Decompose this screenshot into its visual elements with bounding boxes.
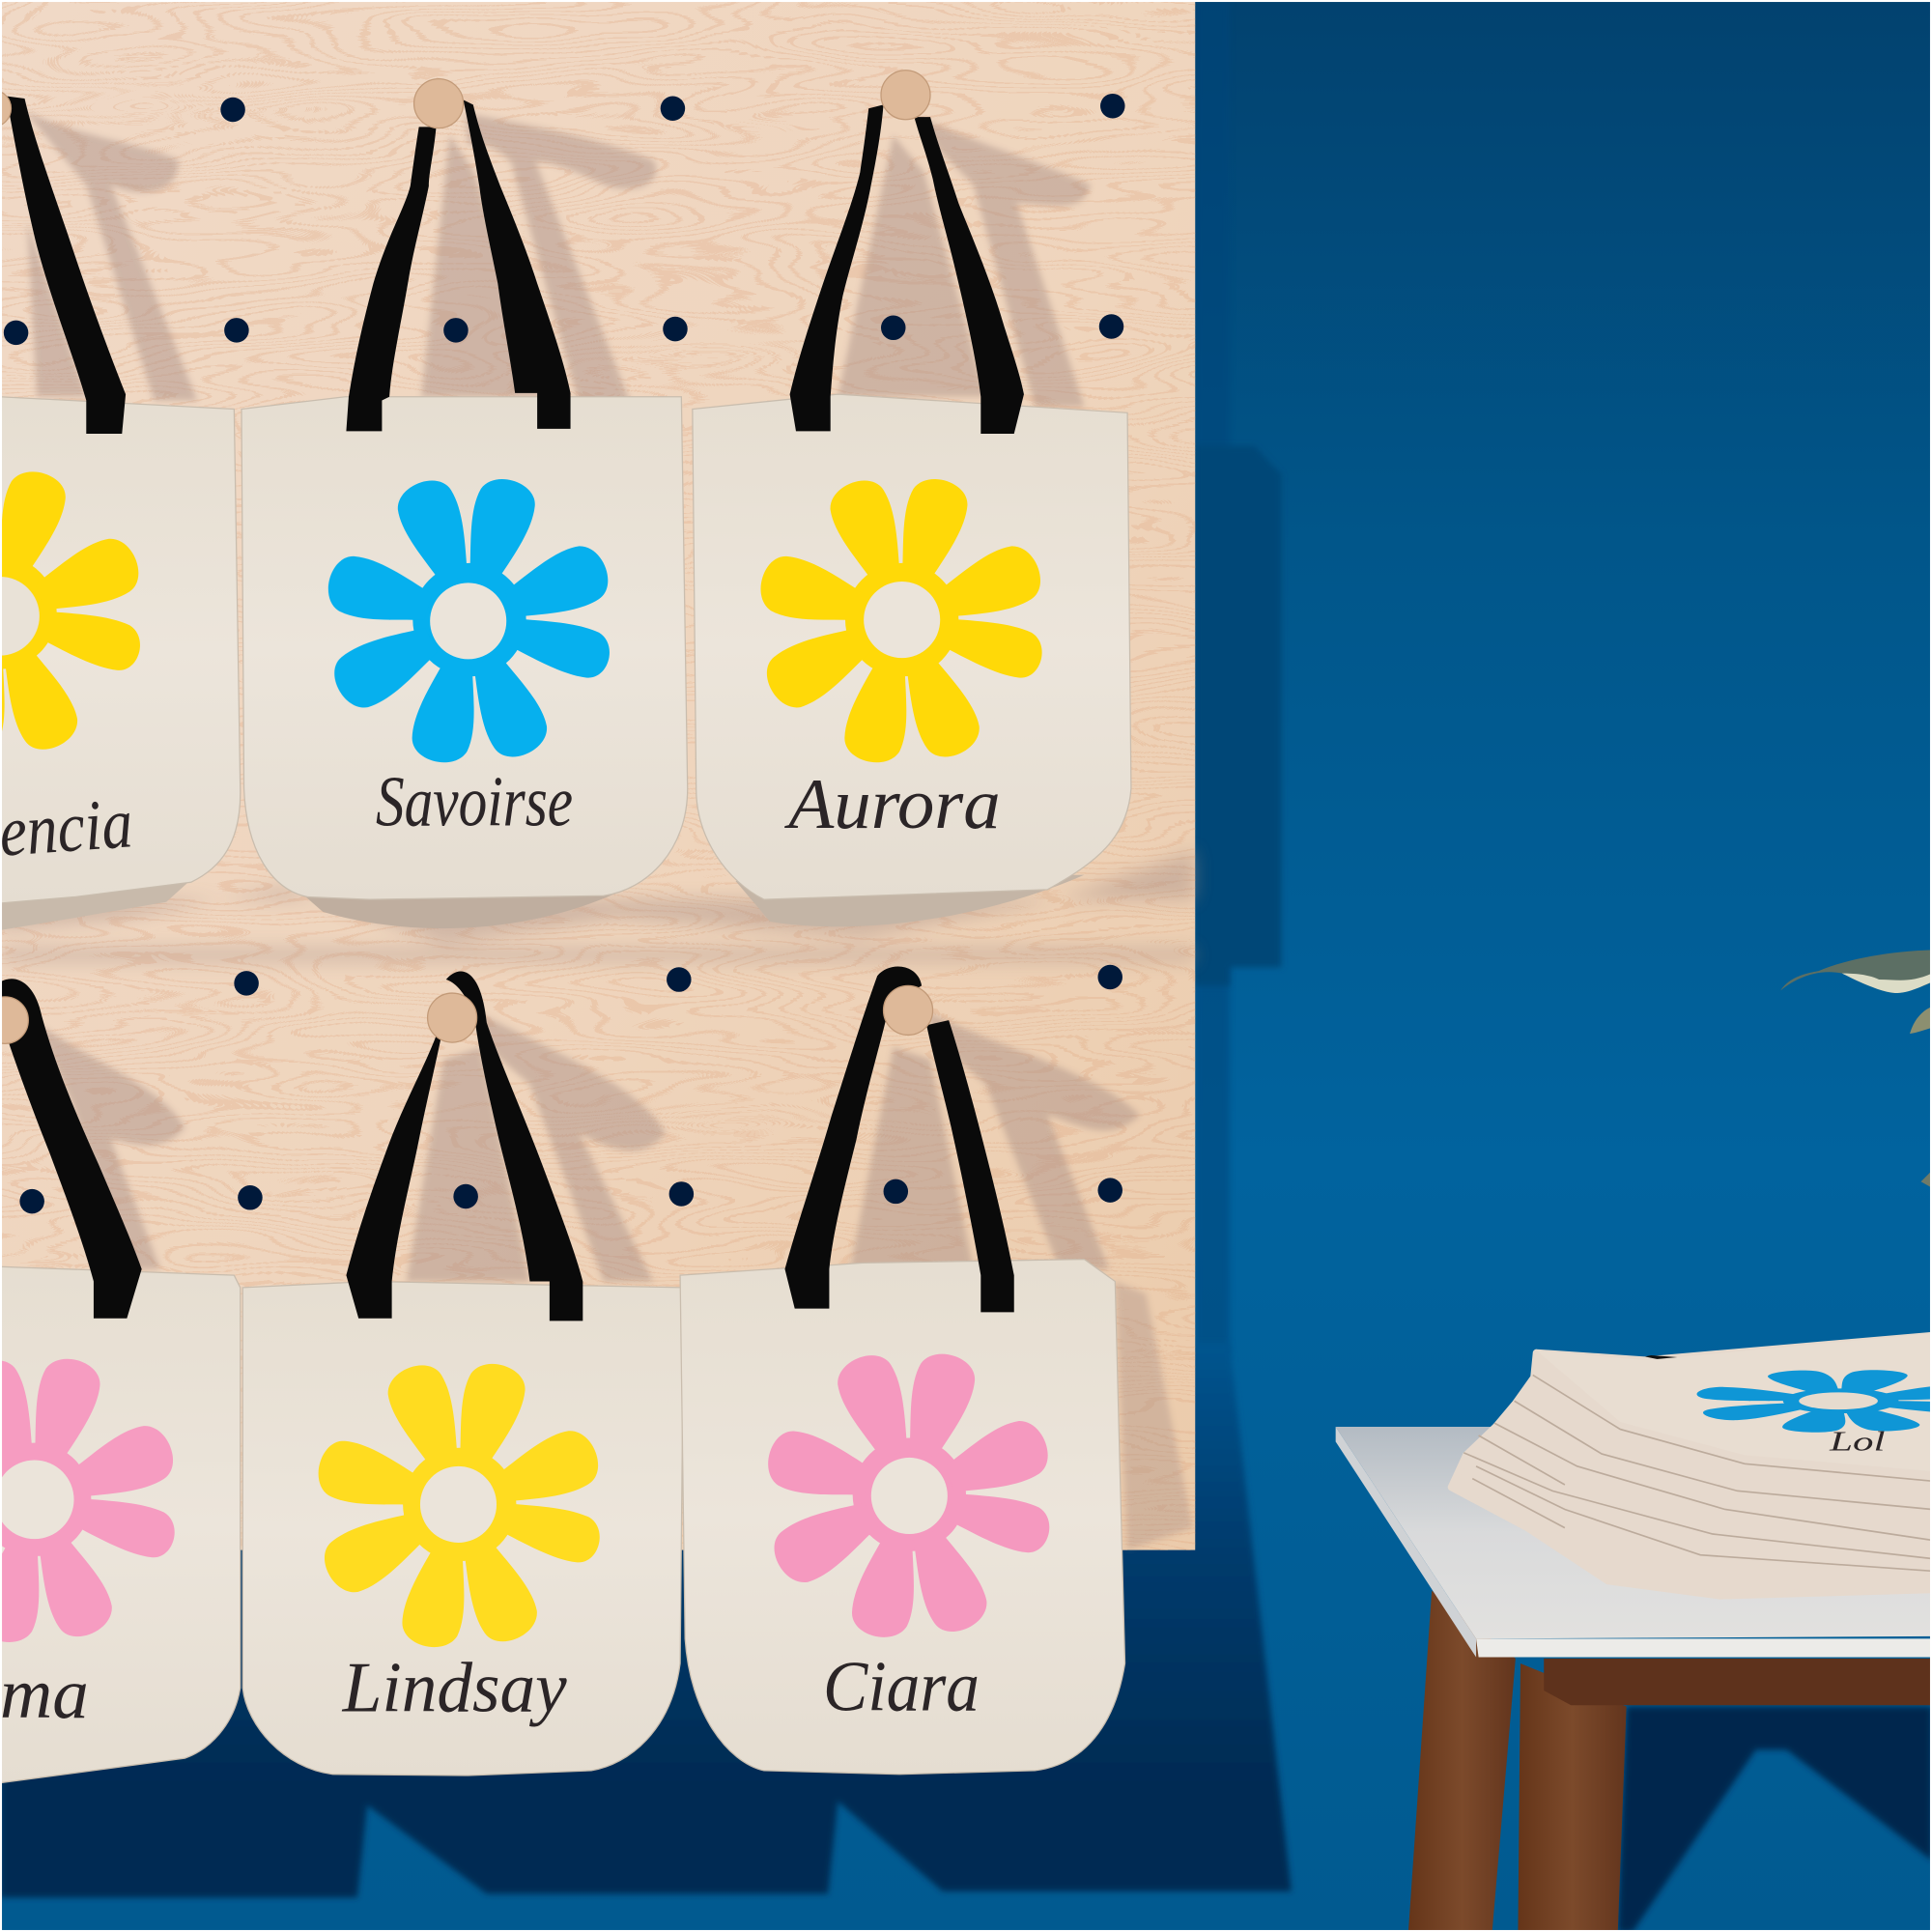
tote bag: Valencia, top left [0,96,241,930]
tote bag: Savoirse: Savoirse [376,763,573,842]
stack of folded tote bags [1452,1333,1932,1596]
shadow band beneath top row of bags [0,850,1195,961]
wooden pegs [0,71,933,1043]
table [1336,1427,1932,1932]
tote bag: Ema, bottom left [0,979,241,1783]
table leg shadow on wall [1618,1707,1932,1932]
tote bag: Ema, bottom left: ma [0,1655,89,1734]
tote bag: Aurora: Aurora [783,765,1001,844]
tote bag: Savoirse [242,99,688,928]
tote bag: Aurora [693,104,1131,926]
tote bag: Lindsay [242,971,684,1776]
pegboard holes [4,94,1125,1213]
wall shadows cast by pegboard and bags [0,0,1292,1897]
tote bag: Lindsay: Lindsay [342,1649,567,1728]
shadows on pegboard [25,111,1193,1550]
pegboard panel [0,0,1195,1550]
tote bag: Valencia, top left: encia [0,783,135,872]
tote bag: Ciara: Ciara [823,1647,980,1726]
tote bag: Ciara [680,967,1125,1775]
stack of folded tote bags: Lol [1829,1427,1886,1457]
plant leaves [1780,950,1932,1188]
